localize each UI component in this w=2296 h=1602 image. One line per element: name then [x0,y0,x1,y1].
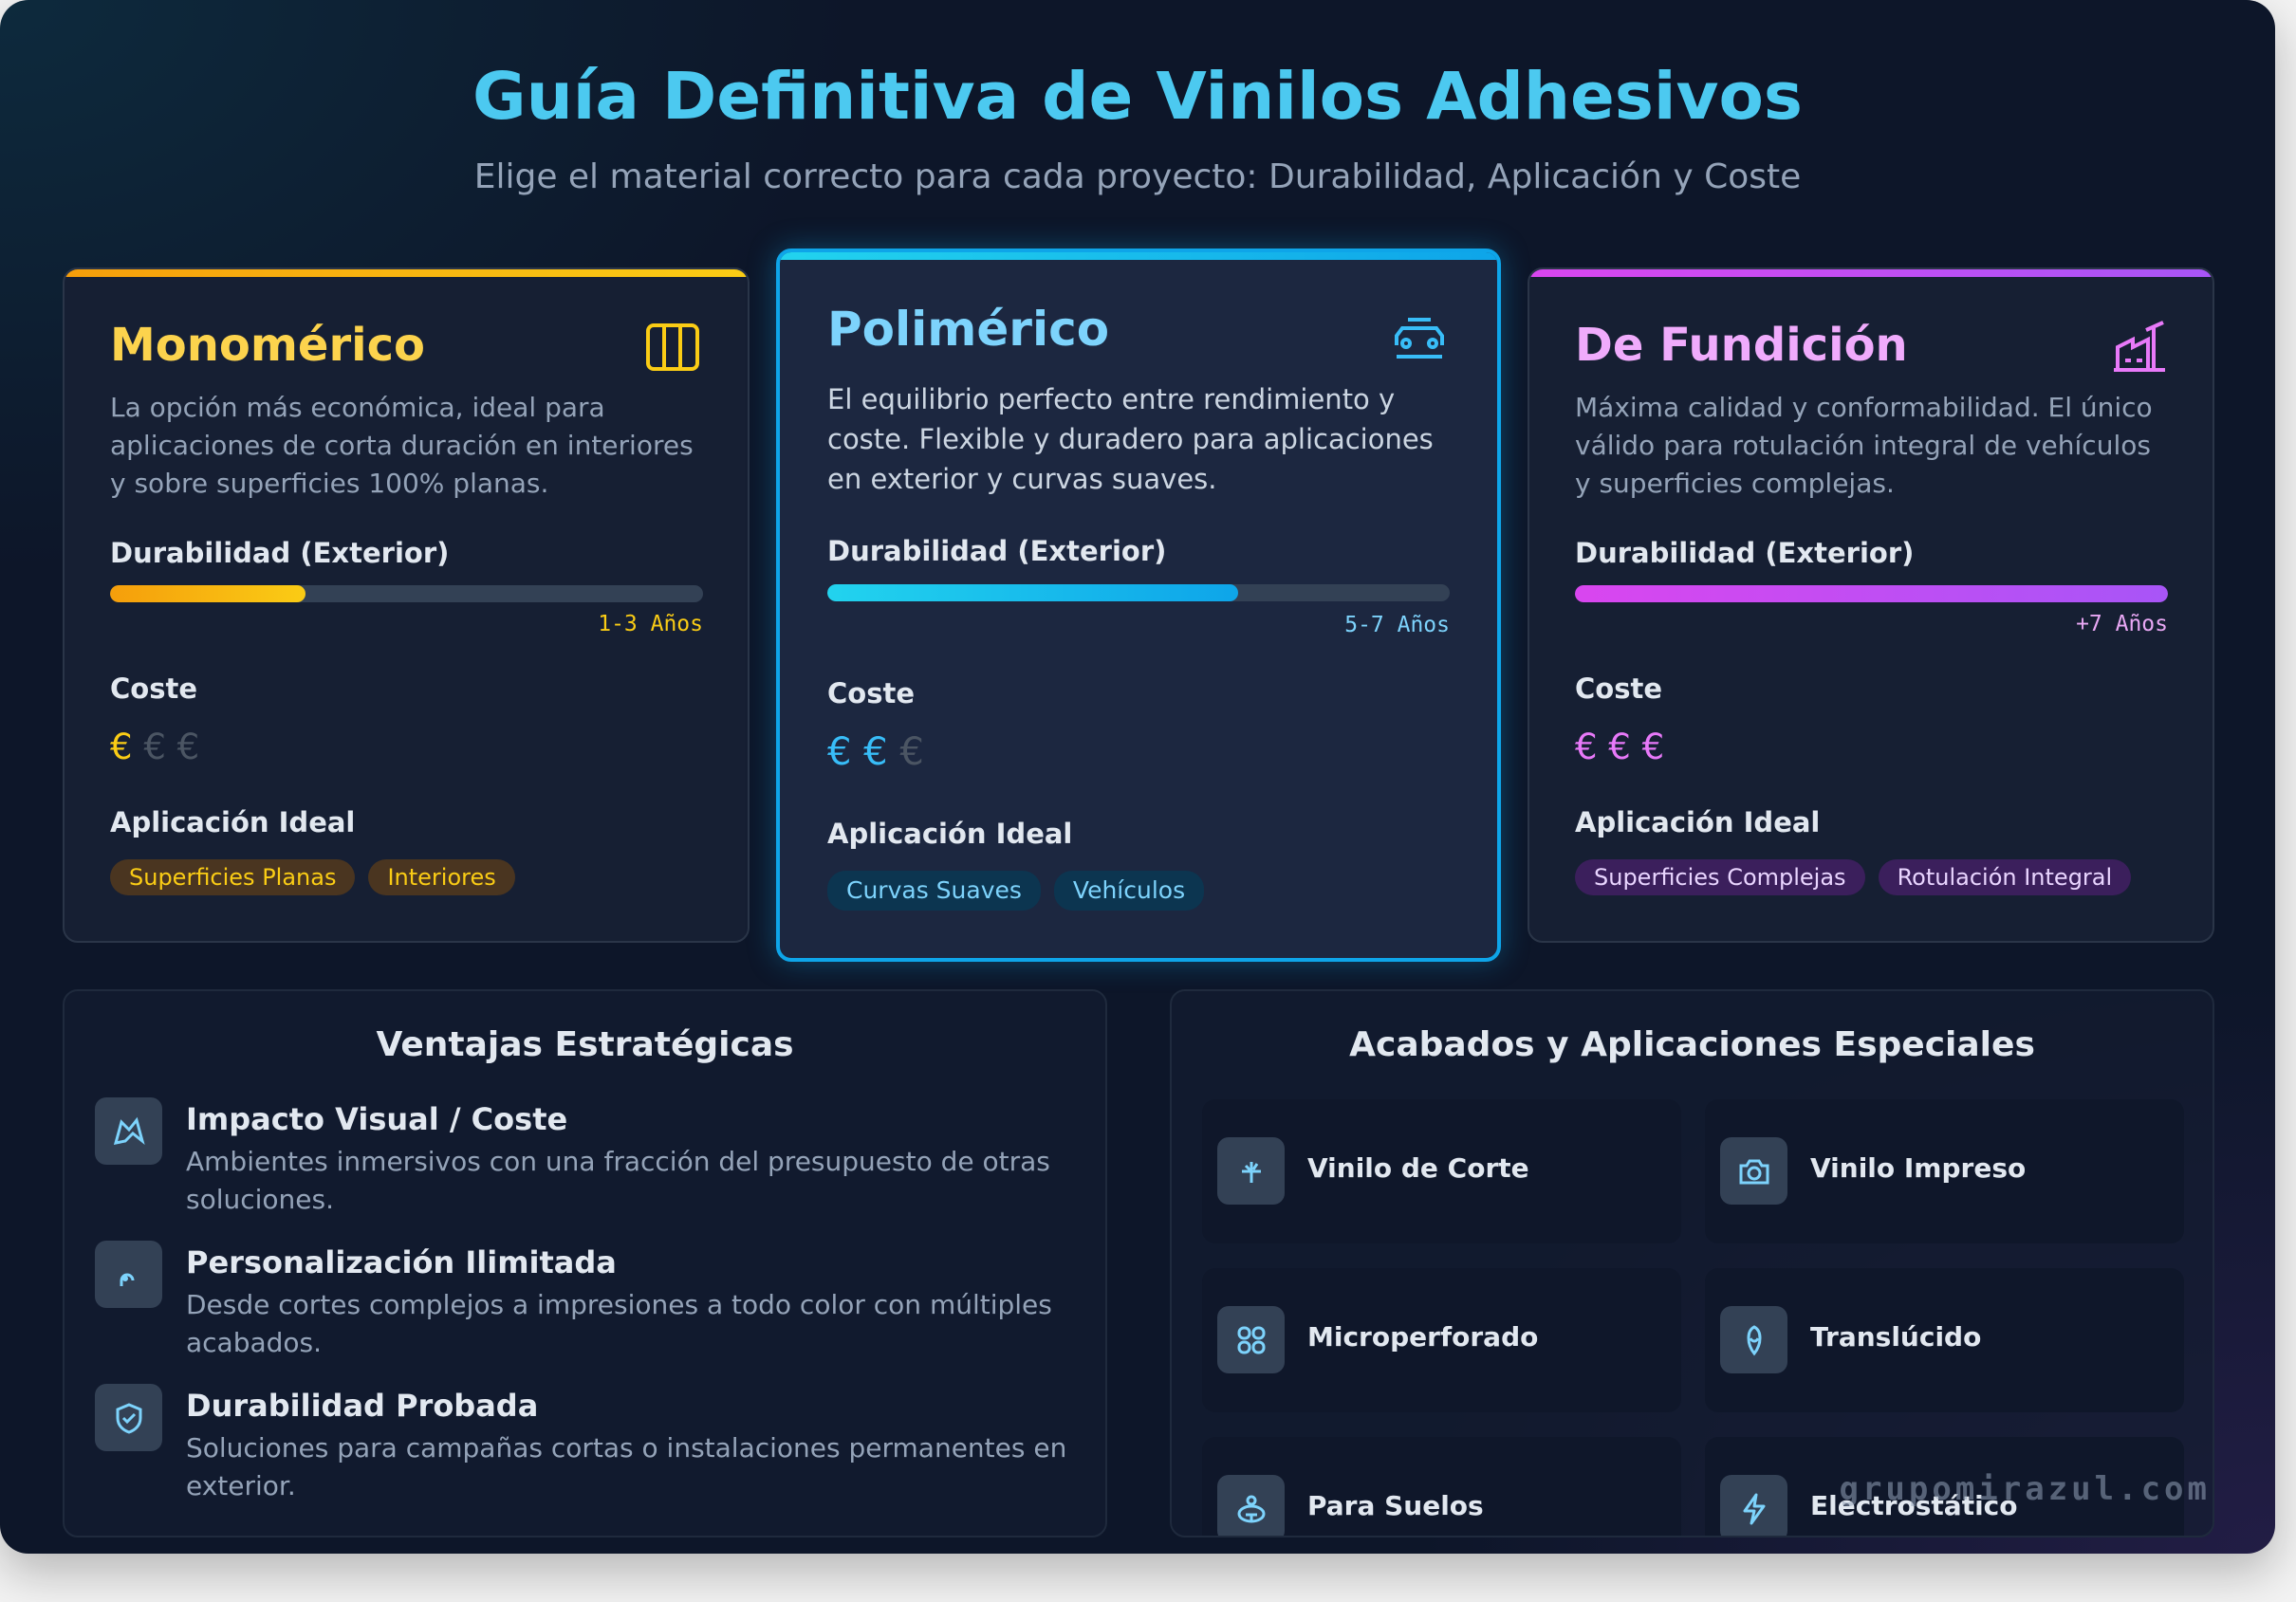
icon: brush [95,1241,162,1308]
tags: Vehículos [1073,876,1185,904]
icon: map [95,1097,162,1165]
description: La opción más económica, ideal para aplicaciones de corta duración en interiores y sobre superficies 100% planas. [110,392,694,499]
cell: Vinilo Impreso: Vinilo Impreso [1810,1152,2026,1184]
item: Durabilidad Probada [95,1384,1066,1501]
icon: camera [1720,1137,1787,1205]
label coste: Coste [1575,672,1662,705]
item: Personalización [95,1241,1052,1358]
watermark: grupomirazul.com [1839,1470,2211,1508]
heading: Monomérico: Monomérico [110,319,425,372]
bar chart: durability [1575,585,2168,602]
icon: dots [1217,1306,1285,1373]
bar chart: durability [827,584,1450,601]
item: Personalización: Desde cortes complejos a impresiones a todo color con múltiples acabados. [186,1289,1052,1358]
icon: roll [646,323,699,371]
cell: Microperforado: Microperforado [1307,1321,1538,1353]
label coste: Coste [110,672,197,705]
subtitle: Elige el material correcto para cada proyecto: Durabilidad, Aplicación y Coste [474,157,1801,196]
heading: Ventajas Estratégicas [376,1025,794,1064]
label aplicación: Aplicación Ideal [110,806,355,838]
panel: De Fundición [1528,267,2214,943]
heading: Polimérico: Polimérico [827,302,1109,357]
cell: Para Suelos [1202,1437,1681,1581]
tags: Interiores [387,864,496,891]
cell: Translúcido [1705,1268,2184,1412]
heading: De Fundición: De Fundición [1575,319,1908,372]
cost euros: € € € [1575,727,1664,767]
tags: Curvas Suaves [846,876,1022,904]
icon: floor [1217,1475,1285,1542]
cell: Electrostático: Electrostático [1810,1490,2018,1521]
label aplicación: Aplicación Ideal [827,818,1072,850]
bar chart: durability [110,585,703,602]
icon: bulb [1720,1306,1787,1373]
cell: Translúcido: Translúcido [1810,1321,1981,1353]
tags: Rotulación Integral [1898,864,2112,891]
years: +7 Años [2076,612,2168,636]
years: 5-7 Años [1344,613,1450,637]
description: El equilibrio perfecto entre rendimiento y coste. Flexible y duradero para aplicaciones en exterior y curvas suaves. [827,383,1434,495]
panel: Acabados y Aplicaciones Especiales [1170,989,2214,1538]
item: Durabilidad Probada: Durabilidad Probada [186,1388,538,1424]
icon: cut [1217,1137,1285,1205]
cell: Microperforado [1202,1268,1681,1412]
panel: Ventajas Estratégicas [63,989,1107,1538]
title: Guía Definitiva de Vinilos Adhesivos [472,59,1803,135]
cell: Para Suelos: Para Suelos [1307,1490,1484,1521]
tags: Superficies Complejas [1594,864,1846,891]
item: Durabilidad Probada: Soluciones para campañas cortas o instalaciones permanentes en exterior. [186,1432,1066,1501]
item: Impacto Visual: Impacto Visual / Coste [186,1101,567,1137]
label coste: Coste [827,677,915,709]
icon: shield [95,1384,162,1451]
panel: Monomérico [63,267,750,943]
cost euros: € € € [827,730,924,774]
tags: Superficies Planas [129,864,336,891]
tags [110,859,515,895]
icon: car [1395,318,1444,359]
cell: Electrostático [1705,1437,2184,1581]
cost euros: € € € [110,727,199,767]
label durabilidad: Durabilidad (Exterior) [110,537,449,569]
tags [827,871,1204,911]
cell: Vinilo de Corte: Vinilo de Corte [1307,1152,1529,1184]
cell: Vinilo Impreso [1705,1099,2184,1243]
label durabilidad: Durabilidad (Exterior) [827,535,1166,567]
description: Máxima calidad y conformabilidad. El único válido para rotulación integral de vehículos y superficies complejas. [1575,392,2153,499]
icon: factory [2114,321,2165,372]
item: Personalización: Personalización Ilimitada [186,1244,617,1280]
cell: Vinilo de Corte [1202,1099,1681,1243]
label aplicación: Aplicación Ideal [1575,806,1820,838]
heading: Acabados y Aplicaciones Especiales [1349,1025,2035,1064]
item: Impacto Visual: Ambientes inmersivos con una fracción del presupuesto de otras soluciones. [186,1146,1050,1215]
panel: Polimérico [776,249,1501,962]
icon: lightning [1720,1475,1787,1542]
label durabilidad: Durabilidad (Exterior) [1575,537,1914,569]
tags [1575,859,2131,895]
item: Impacto Visual [95,1097,1050,1215]
years: 1-3 Años [598,612,703,636]
